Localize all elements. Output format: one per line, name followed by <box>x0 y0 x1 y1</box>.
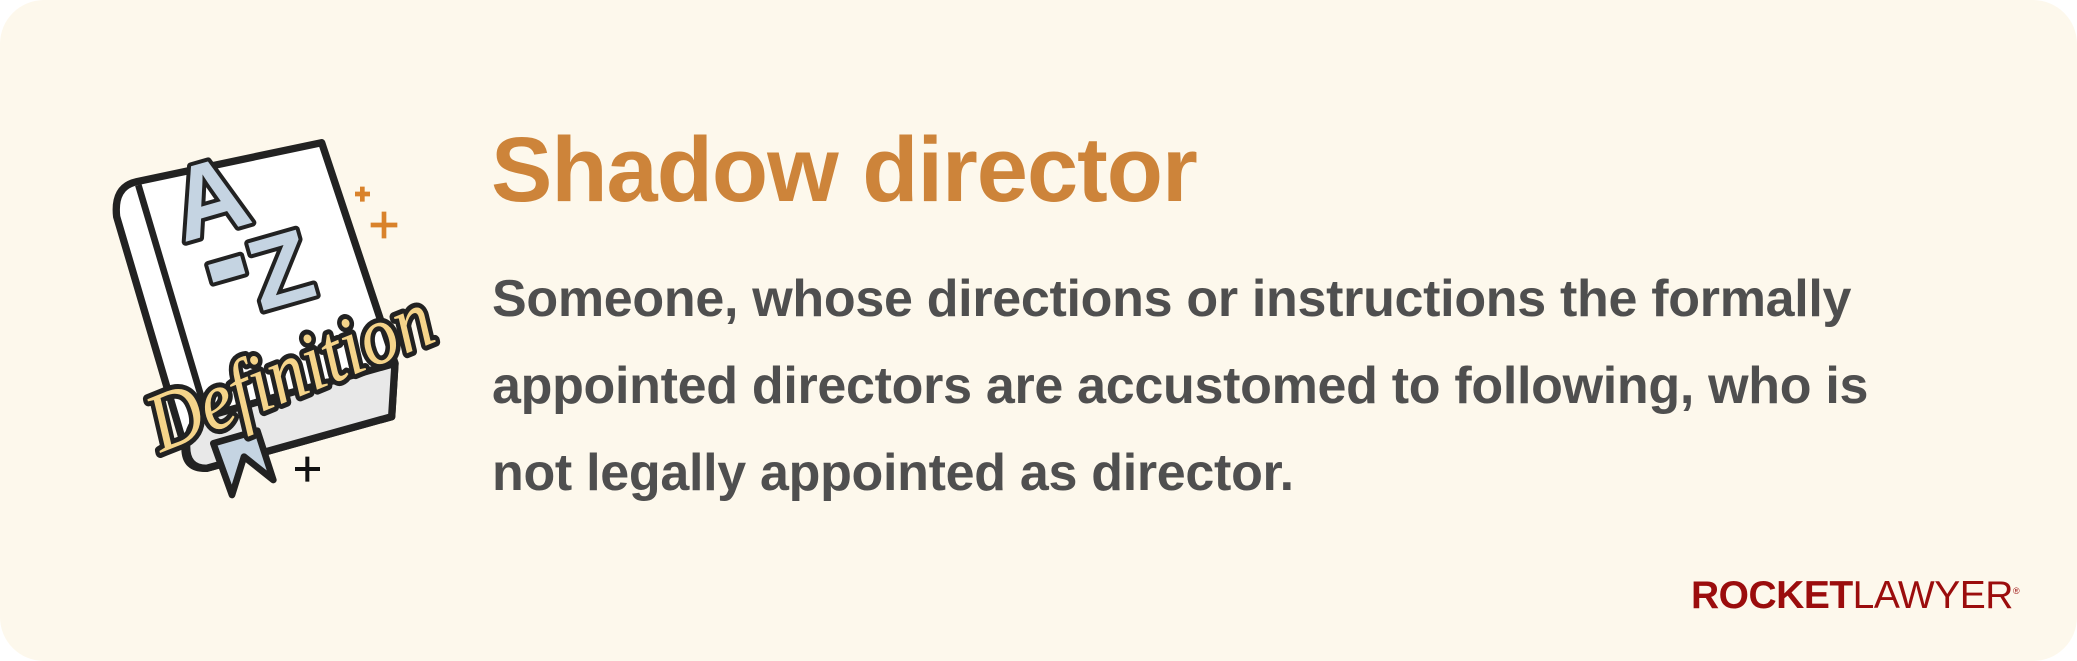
definition text: not legally appointed as director. <box>492 444 1294 502</box>
book cover <box>116 143 395 468</box>
letters A - Z <box>157 132 326 333</box>
definition text: Someone, whose directions or instructions the formally <box>492 270 1851 328</box>
logo: Rocket Lawyer: ROCKETLAWYER® <box>1691 574 2019 617</box>
icon: A-Z definition book <box>112 132 446 498</box>
letters A - Z: A <box>157 132 261 264</box>
bookmark <box>213 431 273 495</box>
definition text: appointed directors are accustomed to following, who is <box>492 357 1868 415</box>
definition text <box>492 270 1868 502</box>
sparkles <box>355 187 397 238</box>
letters A - Z: Z <box>236 208 326 333</box>
title: Shadow director <box>491 119 1197 221</box>
